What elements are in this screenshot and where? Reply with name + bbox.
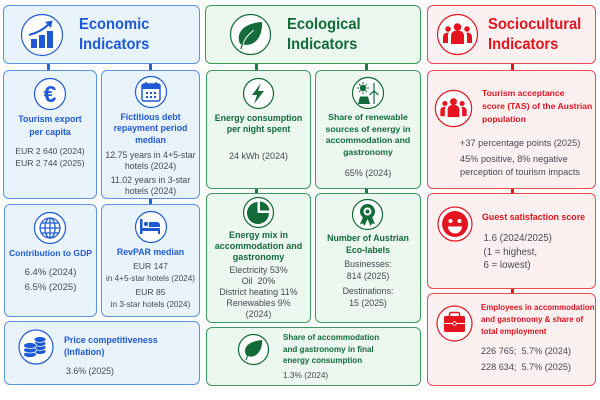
values: 45% positive, 8% negative xyxy=(460,154,568,164)
panel: economic header xyxy=(3,5,200,64)
values: +37 percentage points (2025) xyxy=(460,138,580,148)
values: Renewables 9% xyxy=(226,298,291,308)
values: in 3-star hotels (2024) xyxy=(111,300,190,308)
heading xyxy=(488,16,581,53)
panel: tourism export xyxy=(3,70,97,199)
heading: per night spent xyxy=(227,124,290,134)
heading xyxy=(114,112,187,145)
heading: median xyxy=(135,135,166,145)
values: hotels (2024) xyxy=(125,186,176,196)
values: 6.5% (2025) xyxy=(25,282,76,293)
heading xyxy=(79,16,149,53)
icon: sun, wind turbine, solar panel xyxy=(352,76,384,110)
heading: Energy mix in xyxy=(229,230,288,240)
value: 24 kWh (2024) xyxy=(229,151,288,161)
panel: energy mix xyxy=(206,193,311,323)
heading: Indicators xyxy=(287,36,357,53)
panel: share of renewable xyxy=(315,70,421,189)
values: EUR 147 xyxy=(133,261,168,271)
icon: smiley xyxy=(437,206,473,242)
panel: employees xyxy=(427,293,596,386)
value: 3.6% (2025) xyxy=(66,366,114,376)
icon: coins xyxy=(18,329,54,365)
heading: Indicators xyxy=(488,36,558,53)
heading: and gastronomy in final xyxy=(283,344,374,354)
icon: lightning xyxy=(242,78,274,110)
panel: energy consumption xyxy=(206,70,311,189)
heading: total employment xyxy=(481,326,546,336)
values: Businesses: xyxy=(344,259,392,269)
heading: Share of accommodation xyxy=(283,333,379,342)
icon: rosette xyxy=(352,198,384,230)
values: hotels (2024) xyxy=(125,160,176,170)
heading: Indicators xyxy=(79,36,149,53)
values: in 4+5-star hotels (2024) xyxy=(106,274,195,282)
heading xyxy=(283,333,379,365)
heading xyxy=(327,233,409,255)
values: District heating 11% xyxy=(219,287,298,297)
value: 1.3% (2024) xyxy=(283,370,328,380)
heading: energy consumption xyxy=(283,356,362,365)
heading xyxy=(64,335,158,357)
values: (2024) xyxy=(246,309,271,319)
heading xyxy=(326,112,410,157)
heading: Ecological xyxy=(287,16,361,33)
values: Oil 20% xyxy=(242,276,275,286)
values: EUR 2 744 (2025) xyxy=(15,158,85,168)
values: 12.75 years in 4+5-star xyxy=(105,150,196,160)
heading xyxy=(215,230,302,262)
icon: people xyxy=(434,90,472,128)
icon: growth chart xyxy=(20,14,64,56)
heading xyxy=(482,88,592,124)
heading: Guest satisfaction score xyxy=(482,212,585,222)
values xyxy=(344,259,392,281)
heading: repayment period xyxy=(114,123,187,133)
panel: contribution to GDP xyxy=(4,204,97,317)
heading: gastronomy xyxy=(233,252,284,262)
heading: and gastronomy & share of xyxy=(481,314,583,324)
values xyxy=(15,146,85,168)
heading: Sociocultural xyxy=(488,16,581,33)
icon: euro: € xyxy=(44,81,57,107)
panel: fictitious debt xyxy=(101,70,200,199)
heading: Tourism export xyxy=(18,114,82,124)
values: 226 765; 5.7% (2024) xyxy=(481,346,571,356)
icon: briefcase xyxy=(436,305,473,342)
values xyxy=(343,286,393,308)
heading: per capita xyxy=(29,126,71,136)
heading: accommodation and xyxy=(326,135,410,145)
values xyxy=(484,233,552,271)
heading: (Inflation) xyxy=(64,347,104,357)
heading: gastronomy xyxy=(343,147,393,157)
panel: RevPAR median xyxy=(101,204,200,317)
values xyxy=(460,154,580,177)
values: EUR 2 640 (2024) xyxy=(15,146,85,156)
panel: price competitiveness xyxy=(4,321,200,385)
panel: sociocultural header xyxy=(427,5,596,64)
heading: Employees in accommodation xyxy=(481,302,595,312)
values xyxy=(105,150,196,171)
values: Destinations: xyxy=(343,286,393,296)
icon: bed xyxy=(134,210,168,244)
heading xyxy=(481,302,595,336)
heading: sources of energy in xyxy=(326,124,410,134)
heading xyxy=(18,114,82,137)
value: 65% (2024) xyxy=(345,168,391,178)
values xyxy=(219,265,298,319)
heading: RevPAR median xyxy=(117,247,184,257)
values: (1 = highest, xyxy=(484,246,537,258)
heading: Economic xyxy=(79,16,149,33)
values: EUR 85 xyxy=(135,287,166,297)
heading: Eco-labels xyxy=(346,245,390,255)
icon: leaf xyxy=(238,334,270,366)
heading: accommodation and xyxy=(215,241,302,251)
heading: Energy consumption xyxy=(215,112,302,122)
icon: euro xyxy=(34,78,66,110)
values: 11.02 years in 3-star xyxy=(111,174,190,184)
icon: globe xyxy=(34,212,66,244)
values xyxy=(106,261,195,282)
values xyxy=(111,287,190,308)
values: Electricity 53% xyxy=(229,265,288,275)
values: perception of tourism impacts xyxy=(460,166,580,176)
values: 15 (2025) xyxy=(349,298,387,308)
icon: people xyxy=(436,14,478,56)
values: 814 (2025) xyxy=(347,270,389,280)
panel: eco-labels xyxy=(315,193,421,323)
values xyxy=(481,344,571,375)
values: 228 634; 5.7% (2025) xyxy=(481,362,571,372)
panel: share in final energy consumption xyxy=(206,327,421,386)
values: 6 = lowest) xyxy=(484,260,531,271)
icon: pie chart xyxy=(242,196,274,228)
panel: ecological header xyxy=(205,5,421,64)
heading: Contribution to GDP xyxy=(9,248,92,258)
heading: Price competitiveness xyxy=(64,335,158,345)
heading xyxy=(287,16,361,53)
icon: calendar xyxy=(134,76,168,108)
panel: guest satisfaction xyxy=(427,193,596,289)
heading xyxy=(215,112,302,134)
values: 1.6 (2024/2025) xyxy=(484,233,552,244)
values xyxy=(25,267,76,293)
panel: tourism acceptance xyxy=(427,70,596,189)
heading: Number of Austrian xyxy=(327,233,409,243)
values: 6.4% (2024) xyxy=(25,267,76,278)
heading: Tourism acceptance xyxy=(482,88,564,98)
icon: leaf xyxy=(230,14,272,56)
heading: Fictitious debt xyxy=(120,112,181,122)
values xyxy=(111,174,190,196)
heading: Share of renewable xyxy=(328,112,408,122)
heading: score (TAS) of the Austrian xyxy=(482,100,592,110)
heading: population xyxy=(482,114,526,124)
